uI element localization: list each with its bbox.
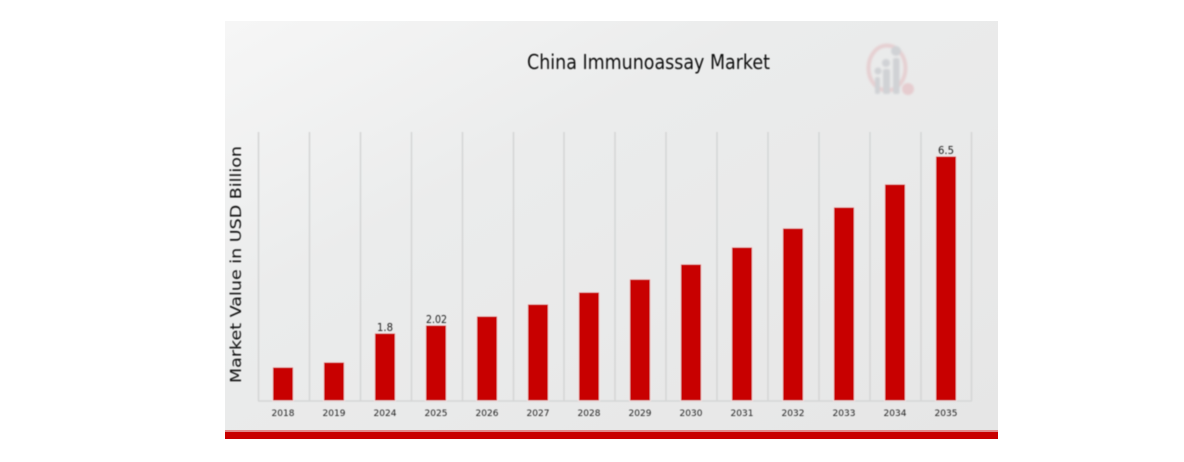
x axis labels: 2034	[884, 409, 907, 419]
grid lines	[258, 132, 972, 401]
x axis labels: 2032	[782, 409, 804, 419]
x axis labels: 2026	[476, 409, 499, 419]
footer bar	[225, 430, 998, 439]
chart: market value bars	[227, 132, 972, 419]
value labels: 2.02	[426, 313, 447, 326]
x axis labels: 2030	[680, 409, 703, 419]
x axis labels: 2027	[527, 409, 549, 419]
x axis labels: 2029	[629, 409, 652, 419]
x axis labels: 2024	[374, 409, 397, 419]
panel: chart background	[225, 21, 998, 439]
title: China Immunoassay Market	[527, 50, 770, 74]
x axis labels	[272, 409, 957, 419]
value labels	[377, 144, 954, 334]
x axis labels: 2025	[425, 409, 447, 419]
value labels: 1.8	[377, 321, 393, 334]
x axis labels: 2019	[323, 409, 346, 419]
x axis labels: 2033	[833, 409, 855, 419]
x axis labels: 2035	[935, 409, 957, 419]
x axis labels: 2018	[272, 409, 295, 419]
value labels: 6.5	[938, 144, 954, 157]
x axis labels: 2028	[578, 409, 601, 419]
bars	[272, 156, 956, 401]
y axis title: Market Value in USD Billion	[227, 146, 245, 383]
x axis labels: 2031	[731, 409, 753, 419]
icon: watermark logo	[868, 46, 914, 95]
